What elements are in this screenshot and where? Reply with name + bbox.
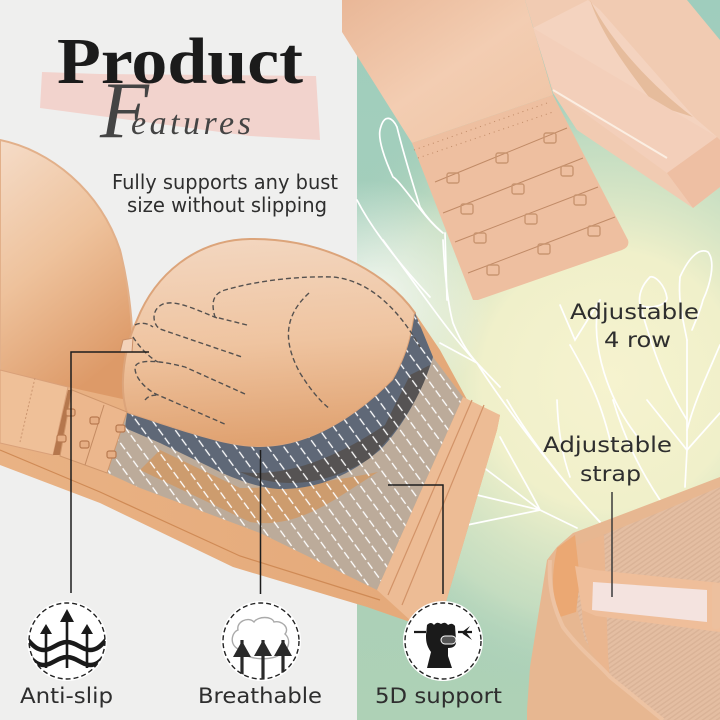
hook band left xyxy=(0,370,68,455)
title: Product: Product xyxy=(57,25,303,98)
icon: anti-slip xyxy=(27,601,107,681)
inner fold xyxy=(533,0,717,173)
dashed finger and thumb stitching xyxy=(133,277,420,425)
botanical line art xyxy=(357,118,720,528)
leader line: breathable xyxy=(260,450,262,594)
label: Adjustable 4 row: 4 row xyxy=(604,328,671,353)
hook band right xyxy=(60,390,127,473)
dark support band xyxy=(125,313,433,489)
icon: 5D support fist xyxy=(403,601,483,681)
band and hem silhouette xyxy=(0,313,500,622)
outer cup xyxy=(527,477,720,720)
hook eyes xyxy=(57,409,125,458)
diagonal white stripes xyxy=(108,316,461,586)
strap slider xyxy=(712,583,720,629)
label: Adjustable 4 row xyxy=(570,300,699,353)
subtitle: Fully supports any bust xyxy=(112,170,338,194)
strap slider frame xyxy=(575,566,720,632)
elastic strip xyxy=(533,28,717,173)
leader line: 5D support xyxy=(388,485,443,594)
elastic strap xyxy=(592,582,707,622)
side tab xyxy=(577,535,610,680)
dark band shadow xyxy=(240,365,430,483)
hook slots xyxy=(53,390,72,455)
label: 5D support: 5D support xyxy=(375,684,502,709)
label: Breathable: Breathable xyxy=(198,684,322,709)
brush stroke xyxy=(40,72,320,140)
cup over mesh xyxy=(123,239,415,447)
label: Adjustable strap xyxy=(543,433,672,487)
bottom right: adjustable strap photo xyxy=(527,477,720,720)
label: Adjustable strap: strap xyxy=(580,462,641,487)
centre gore xyxy=(120,338,133,352)
back strap piece xyxy=(525,0,720,208)
label: Anti-slip: Anti-slip xyxy=(20,684,113,709)
hem highlight line xyxy=(0,450,380,600)
inner mesh panel xyxy=(107,313,463,590)
front binding xyxy=(550,560,663,720)
leader line: anti-slip xyxy=(71,352,149,593)
title: Features: F xyxy=(99,67,150,155)
strap leader line xyxy=(611,492,613,597)
background: green gradient panel xyxy=(357,0,720,720)
mesh shadow xyxy=(140,450,378,523)
bra body xyxy=(0,239,500,622)
hooks xyxy=(447,133,600,275)
hook tape xyxy=(412,95,628,300)
label: Adjustable 4 row: Adjustable xyxy=(570,300,699,325)
subtitle: size without slipping xyxy=(127,193,327,217)
end tab xyxy=(667,137,720,208)
top right: hook and eye extender xyxy=(342,0,720,300)
title: Features: eatures xyxy=(131,105,254,142)
satin piece xyxy=(342,0,553,143)
right side boning strip xyxy=(377,397,500,622)
subtitle xyxy=(112,170,338,217)
inner orange fold xyxy=(553,535,580,617)
left cup xyxy=(0,140,135,410)
icon: breathable xyxy=(221,601,301,681)
ribbed lining xyxy=(575,487,720,720)
label: Adjustable strap: Adjustable xyxy=(543,433,672,458)
